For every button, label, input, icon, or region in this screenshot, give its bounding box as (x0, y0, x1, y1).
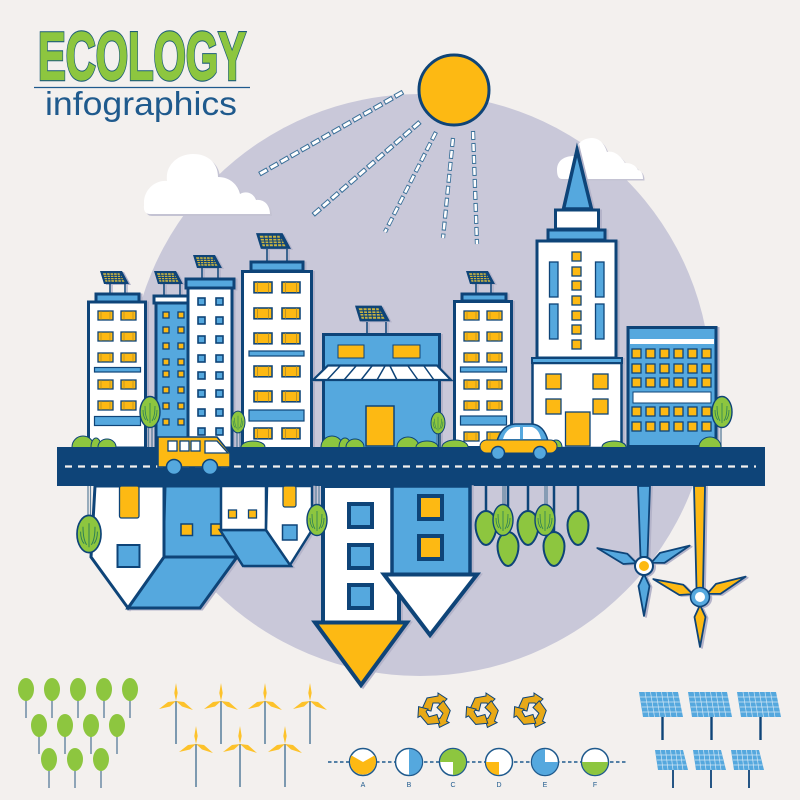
pie icons A to F: E (543, 782, 548, 789)
legend: solar panels (639, 692, 781, 788)
wind turbine: blue (595, 486, 692, 616)
reflected building C with yellow roof (315, 486, 407, 685)
building 1 with solar panel (88, 271, 146, 448)
sun rays (258, 92, 477, 244)
title: ECOLOGY: ECOLOGY (38, 18, 246, 94)
pie icons A to F: C (450, 782, 456, 789)
pie icons A to F (350, 748, 608, 789)
building 2 with solar panel (154, 271, 190, 448)
cloud: left (144, 154, 272, 216)
reflected building D with white roof (384, 486, 477, 635)
building 6 with solar panel (454, 271, 512, 448)
pie icons A to F: D (496, 782, 502, 789)
reflected building B (220, 486, 312, 566)
building 4 with solar panel (242, 233, 312, 448)
pie icons A to F: B (407, 782, 412, 789)
wind turbine: yellow (651, 486, 748, 647)
reflected building A (91, 486, 237, 608)
car (480, 424, 557, 460)
hanging trees under road (77, 486, 588, 566)
title: ECOLOGY: ECOLOGY (38, 18, 246, 94)
office building with grid windows (628, 328, 716, 446)
title: ECOLOGY (38, 18, 246, 94)
dashed timeline (328, 761, 628, 763)
legend: wind turbines (159, 683, 327, 787)
sun (419, 55, 489, 125)
pie icons A to F: A (361, 782, 366, 789)
legend: recycle symbols (413, 693, 553, 731)
legend: trees (18, 678, 138, 788)
bus (158, 437, 230, 474)
street trees and bushes (72, 396, 732, 458)
subtitle: infographics: infographics (45, 85, 237, 122)
pie icons A to F: F (593, 782, 597, 789)
title underline (34, 86, 250, 88)
road (57, 447, 765, 486)
shop building with solar panel (313, 306, 451, 448)
cloud: right (557, 138, 644, 180)
skyscraper tower (532, 150, 622, 448)
building 3 with solar panel (186, 255, 234, 448)
background circle (129, 94, 711, 676)
